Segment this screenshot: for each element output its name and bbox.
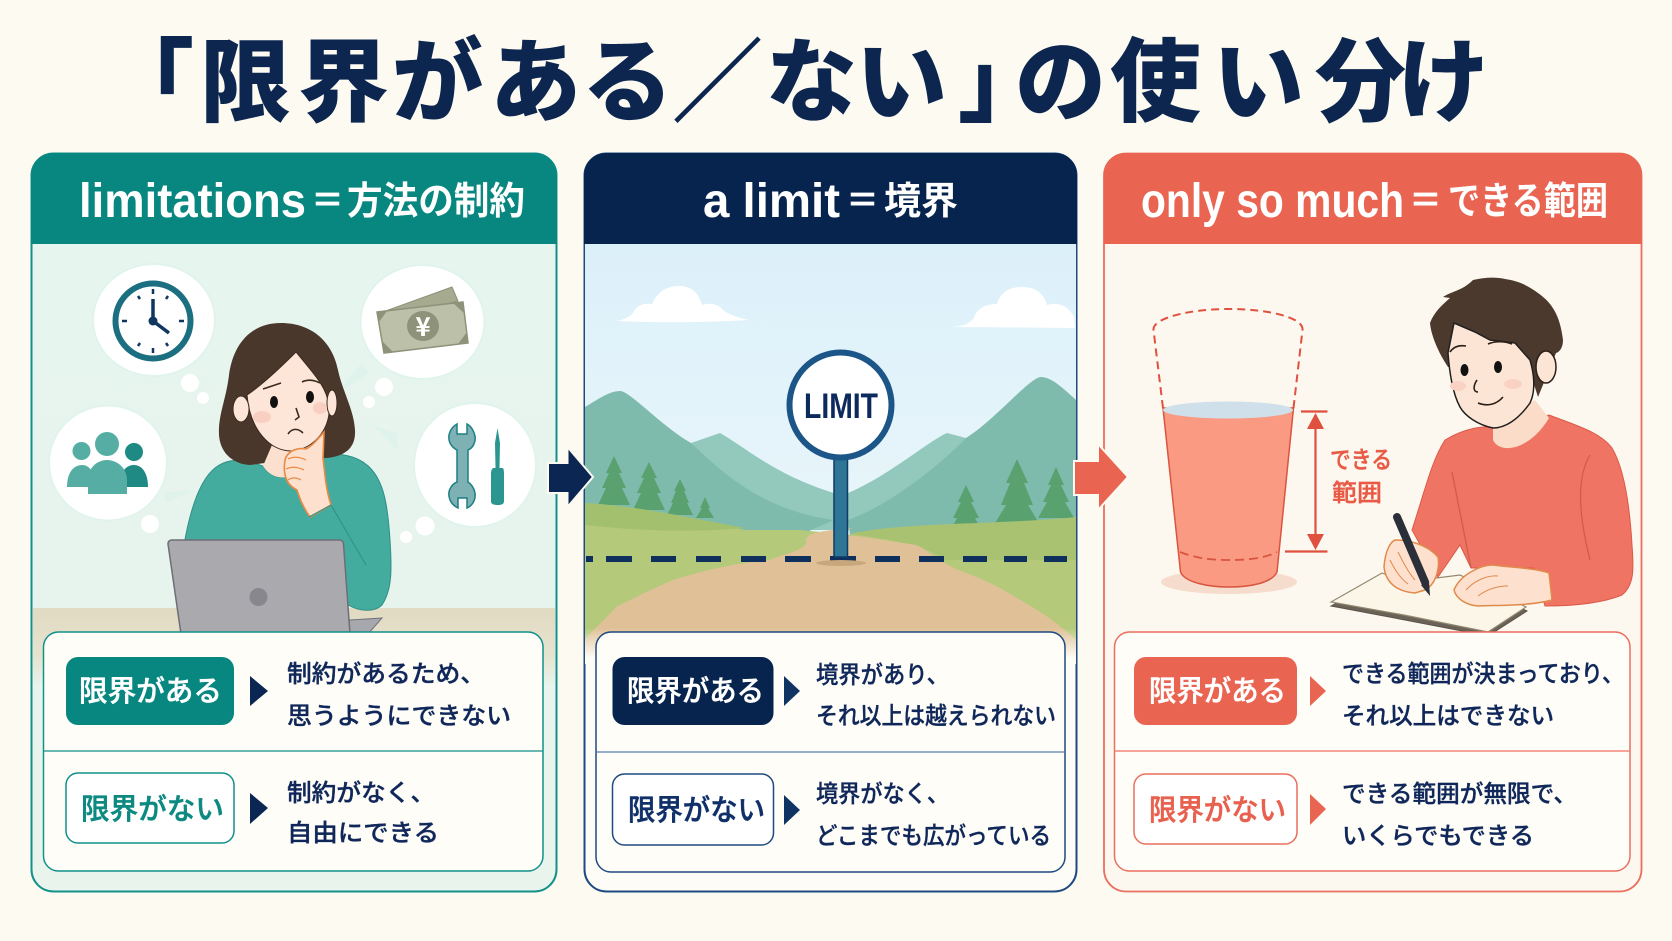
range label [1330,440,1392,508]
heading: only so much [1141,170,1608,228]
row: no limit: 境界がなく、 [816,774,949,809]
LIMIT sign [790,352,892,566]
panel body [584,154,1076,892]
left hand [1384,540,1438,593]
row: no limit [66,773,439,848]
sweater [184,454,391,610]
panel header [31,153,557,244]
hair [219,323,355,465]
row: no limit: 限界がない [1149,787,1286,829]
row: limit exists: それ以上は越えられない [816,696,1056,731]
title: 「限界がある／ない」の使い分け [103,9,1489,141]
icon: money bubble [360,265,484,379]
arrow: navy [548,447,593,507]
row: no limit [1134,774,1577,851]
fade to panel colour [585,628,1076,658]
neck [263,440,322,478]
arrow: coral [1074,444,1128,510]
range label: 範囲 [1332,473,1382,508]
row: no limit: できる範囲が無限で、 [1342,774,1577,809]
icon: money bubble: ¥ [415,307,431,344]
row: no limit [612,774,1051,851]
woman [184,323,391,610]
heading: a limit: a limit [703,175,840,228]
row: limit exists [66,654,511,731]
panel body [32,154,556,892]
LIMIT sign: LIMIT [804,387,878,426]
mountains [691,433,834,530]
heading: a limit: ＝ [846,170,879,225]
row: limit exists: 限界がある [627,668,764,710]
heading: only so much: ＝ [1409,170,1442,225]
row: limit exists: 限界がある [79,668,222,710]
heading: only so much: できる範囲 [1448,170,1608,225]
heading: only so much: only so much [1141,175,1404,228]
row: no limit: 限界がない [81,786,224,828]
sweater [1412,415,1633,606]
heading: limitations: limitations [79,175,306,228]
panel: limitations [31,153,557,892]
row: limit exists: それ以上はできない [1342,696,1554,731]
row: limit exists: 境界があり、 [816,655,949,690]
laptop [168,540,382,634]
row: limit exists: 思うようにできない [287,696,511,731]
comparison box [596,632,1065,872]
neck [1493,400,1549,448]
icon: clock bubble [93,264,215,376]
row: no limit: 自由にできる [287,813,439,848]
panel: a limit [584,153,1077,892]
trees [598,456,1074,524]
notebook [1331,577,1527,636]
heading: limitations: ＝ [311,170,344,225]
hand [284,432,331,517]
man writing [1331,278,1633,636]
face [247,352,329,451]
heading: a limit [703,170,958,228]
landscape [585,244,1076,666]
clouds [616,286,1075,328]
icon: tools bubble [414,403,536,527]
row: no limit: 制約がなく、 [287,773,435,808]
row: limit exists: できる範囲が決まっており、 [1342,654,1624,689]
row: limit exists: 制約があるため、 [287,654,485,689]
row: limit exists [1134,654,1624,731]
heading: a limit: 境界 [884,170,958,225]
boundary dashed line [586,556,1067,562]
comparison box [1114,632,1630,871]
range arrow [1285,412,1328,552]
cup [1153,309,1303,594]
right hand [1454,565,1552,606]
row: no limit: 限界がない [628,787,765,829]
comparison box [44,632,543,871]
dirt road [585,528,1076,664]
range label: できる [1330,440,1392,475]
grass [585,503,1076,640]
face [1448,323,1534,428]
heading: limitations: 方法の制約 [347,170,525,225]
bubble tails [165,365,397,503]
hair [1430,278,1563,397]
pen [1397,517,1425,582]
panel header [584,153,1077,244]
row: limit exists: 限界がある [1149,668,1286,710]
floor [33,608,555,688]
icon: people bubble [49,406,167,520]
thought dots [141,374,434,543]
heading: limitations [79,170,525,228]
panel body [1104,154,1642,892]
row: no limit: いくらでもできる [1342,816,1534,851]
panel header [1104,153,1642,244]
row: limit exists [612,655,1056,731]
panel: only so much [1104,153,1642,892]
row: no limit: どこまでも広がっている [816,816,1051,851]
